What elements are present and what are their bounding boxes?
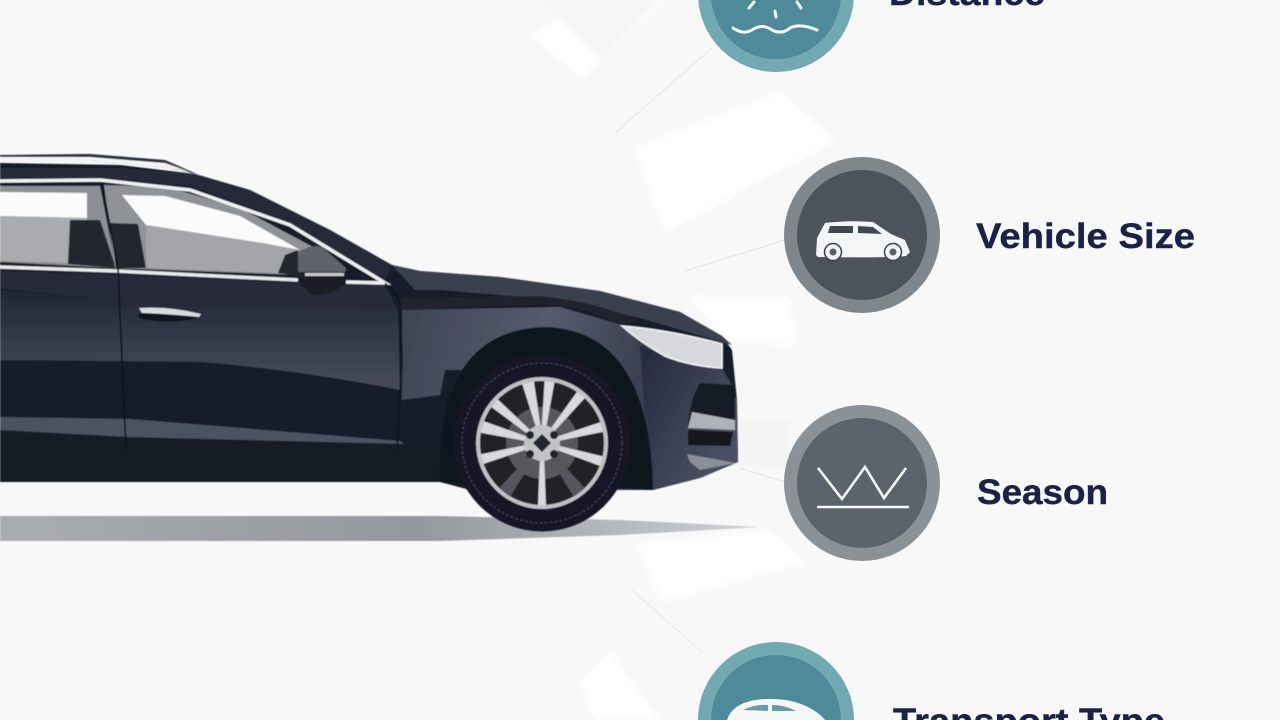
roof rail	[0, 154, 197, 174]
headlight	[622, 326, 722, 368]
roof dark band	[0, 168, 392, 283]
chrome window trim	[0, 180, 385, 283]
door handle	[138, 308, 201, 322]
spokes	[481, 381, 603, 505]
factor: season	[784, 405, 1108, 561]
dark spokes	[499, 448, 585, 497]
car shadow	[0, 516, 760, 541]
front wheel	[454, 354, 630, 532]
icon: distance circle	[698, 0, 854, 72]
wheel arch	[440, 327, 653, 490]
label: vehicle size: Vehicle Size	[976, 217, 1195, 256]
factor: vehicle size	[784, 157, 1195, 313]
bumper vents	[687, 383, 736, 470]
factor: distance	[698, 0, 1045, 72]
side mirror	[298, 246, 346, 295]
car	[0, 154, 738, 532]
icon: vehicle size circle	[784, 157, 940, 313]
hub	[524, 425, 560, 461]
rim	[480, 381, 604, 505]
sill	[0, 432, 445, 482]
lower door highlight	[0, 417, 404, 444]
nose shading	[640, 345, 738, 490]
icon: transport type circle	[698, 642, 854, 720]
tyre	[454, 354, 630, 532]
fender	[402, 307, 738, 490]
front side window	[104, 185, 313, 275]
rear side window	[0, 186, 116, 268]
hood crease	[400, 296, 640, 325]
belt band	[0, 271, 398, 310]
door seams	[102, 184, 402, 450]
door belt chrome	[0, 267, 298, 280]
factor: transport type	[698, 642, 1165, 720]
label: season: Season	[977, 473, 1108, 512]
car body	[0, 163, 738, 490]
door panel	[0, 290, 400, 390]
icon: season circle	[784, 405, 940, 561]
dark door band	[0, 360, 400, 438]
hood	[392, 265, 732, 345]
